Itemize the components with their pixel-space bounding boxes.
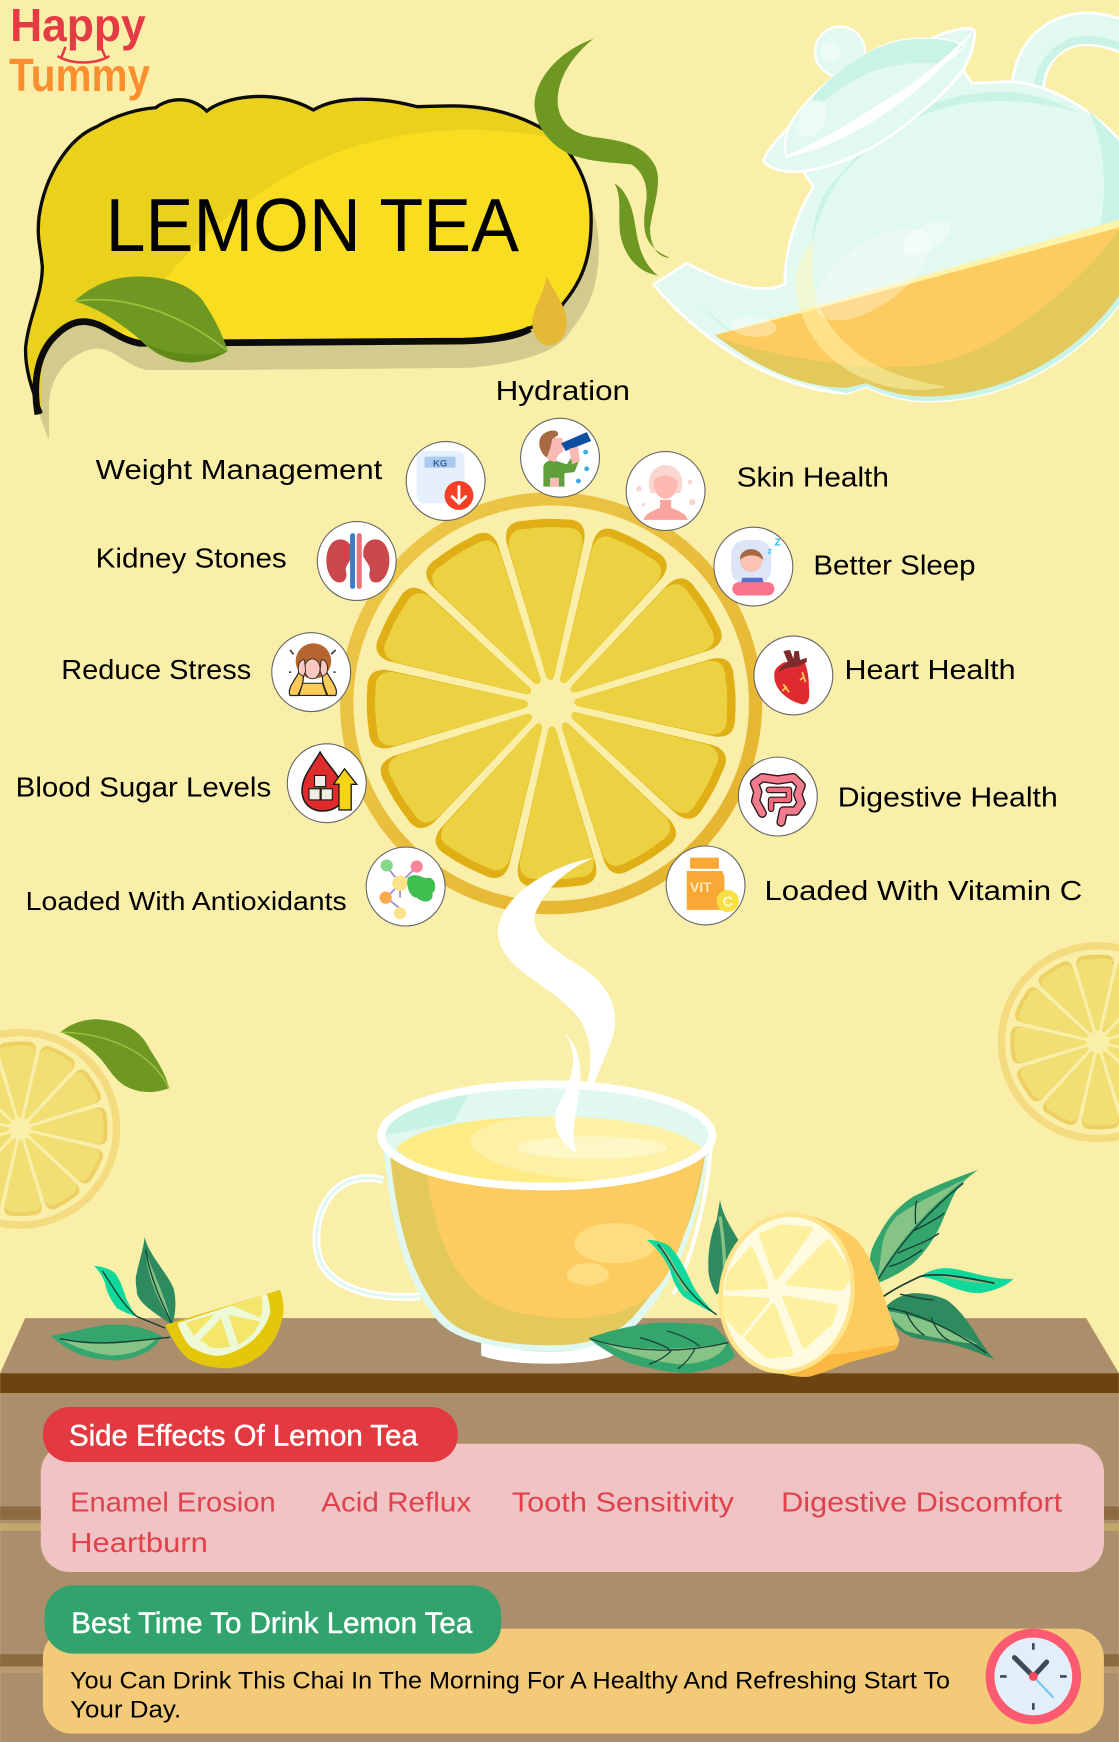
label: Kidney Stones: Kidney Stones bbox=[96, 543, 287, 574]
icon: digestive bbox=[738, 757, 817, 836]
icon: vitamin C: VIT bbox=[690, 879, 712, 895]
teapot bbox=[653, 27, 1119, 401]
icon: leaf left bbox=[61, 1019, 169, 1092]
heading: side effects bbox=[43, 1407, 458, 1462]
label: Weight Management: Weight Management bbox=[96, 454, 383, 485]
lemon slice wheel bbox=[340, 492, 762, 914]
steam: green swirl bbox=[535, 39, 670, 276]
cup handle bbox=[316, 1178, 420, 1297]
speech bubble title panel bbox=[26, 96, 622, 440]
heading: best time bbox=[45, 1585, 501, 1654]
logo: Happy Tummy: Tummy bbox=[9, 49, 150, 101]
label: Loaded With Vitamin C: Loaded With Vitamin C bbox=[764, 875, 1082, 906]
icon: golden drop bbox=[532, 277, 567, 346]
side effect items: Acid Reflux bbox=[321, 1486, 471, 1517]
left lemon wedge with leaves bbox=[51, 1237, 284, 1368]
tea in cup bbox=[389, 1144, 707, 1345]
heading: side effects: Side Effects Of Lemon Tea bbox=[69, 1419, 418, 1452]
teapot body bbox=[653, 70, 1119, 401]
leaf bottom bbox=[588, 1322, 735, 1373]
label: Skin Health: Skin Health bbox=[737, 462, 889, 493]
icon: leaf on bubble bbox=[75, 277, 228, 362]
labels bbox=[16, 375, 1082, 916]
leaf upper right bbox=[870, 1170, 978, 1283]
icon: antioxidants bbox=[366, 847, 445, 926]
heading: best time: Best Time To Drink Lemon Tea bbox=[71, 1607, 473, 1640]
side effect items bbox=[70, 1486, 1063, 1558]
steam: inner wisp bbox=[555, 1032, 580, 1153]
icon: reduce stress bbox=[272, 633, 351, 712]
decorative lemon left bbox=[0, 1029, 120, 1229]
side effect items: Digestive Discomfort bbox=[781, 1486, 1063, 1517]
best time text: You Can Drink This Chai In The Morning For A Healthy And Refreshing Start To bbox=[70, 1668, 950, 1695]
tea cup bbox=[316, 1084, 712, 1364]
panel: best time bbox=[43, 1585, 1104, 1734]
leaf lower right bbox=[886, 1293, 995, 1360]
icon: weight scale: KG bbox=[433, 459, 447, 470]
tea inside teapot bbox=[715, 219, 1119, 397]
side effect items: Enamel Erosion bbox=[70, 1486, 276, 1517]
teapot highlights bbox=[800, 211, 945, 338]
cup base bbox=[481, 1339, 613, 1364]
icon: clock bbox=[986, 1629, 1081, 1724]
leaf tall bbox=[136, 1237, 175, 1325]
leaf narrow bright bbox=[647, 1240, 717, 1315]
icon: hydration bbox=[521, 418, 599, 497]
logo: Happy Tummy: Happy bbox=[10, 0, 146, 51]
label: Blood Sugar Levels: Blood Sugar Levels bbox=[16, 772, 271, 803]
leaf small bright bbox=[94, 1266, 165, 1328]
title: LEMON TEA bbox=[106, 184, 520, 268]
icon: better sleep bbox=[714, 527, 793, 606]
cup rim bbox=[381, 1084, 712, 1187]
label: Digestive Health: Digestive Health bbox=[838, 782, 1058, 813]
lemon body bbox=[780, 1217, 899, 1377]
icon: kidneys bbox=[317, 522, 396, 600]
label: Better Sleep: Better Sleep bbox=[813, 549, 976, 580]
side effect items: Heartburn bbox=[70, 1527, 208, 1558]
table bbox=[0, 1318, 1119, 1742]
label: Reduce Stress: Reduce Stress bbox=[61, 654, 251, 685]
label: Loaded With Antioxidants: Loaded With Antioxidants bbox=[26, 888, 347, 916]
side effect items: Tooth Sensitivity bbox=[512, 1486, 734, 1517]
icon: blood sugar bbox=[287, 744, 366, 823]
cup glass bbox=[382, 1135, 711, 1351]
cup highlights bbox=[574, 1223, 656, 1263]
leaf sprig bright bbox=[883, 1268, 1013, 1297]
lemon cut face bbox=[706, 1202, 868, 1385]
icon: skin health bbox=[626, 452, 705, 530]
teapot handle bbox=[1028, 29, 1119, 87]
leaf tall dark bbox=[708, 1200, 738, 1295]
icon: heart bbox=[754, 636, 833, 715]
logo: Happy Tummy bbox=[9, 0, 150, 101]
best time text: Your Day. bbox=[70, 1697, 181, 1724]
icon: weight scale bbox=[406, 442, 485, 520]
leaf lower bbox=[51, 1325, 170, 1360]
best time text bbox=[70, 1668, 950, 1724]
teapot knob bbox=[815, 27, 865, 77]
label: Hydration: Hydration bbox=[496, 375, 630, 406]
lemon wedge bbox=[165, 1290, 284, 1368]
right half lemon with leaves bbox=[588, 1170, 1013, 1385]
label: Heart Health: Heart Health bbox=[844, 654, 1016, 685]
panel: side effects bbox=[41, 1407, 1104, 1572]
teapot lid bbox=[763, 28, 975, 172]
icon: vitamin C bbox=[666, 846, 745, 925]
icon: better sleep: Z bbox=[774, 537, 781, 548]
steam: white vapor bbox=[498, 858, 615, 1144]
icon: vitamin C: C bbox=[723, 895, 734, 911]
icon: better sleep: Z bbox=[768, 548, 772, 555]
decorative lemon right bbox=[998, 942, 1119, 1142]
